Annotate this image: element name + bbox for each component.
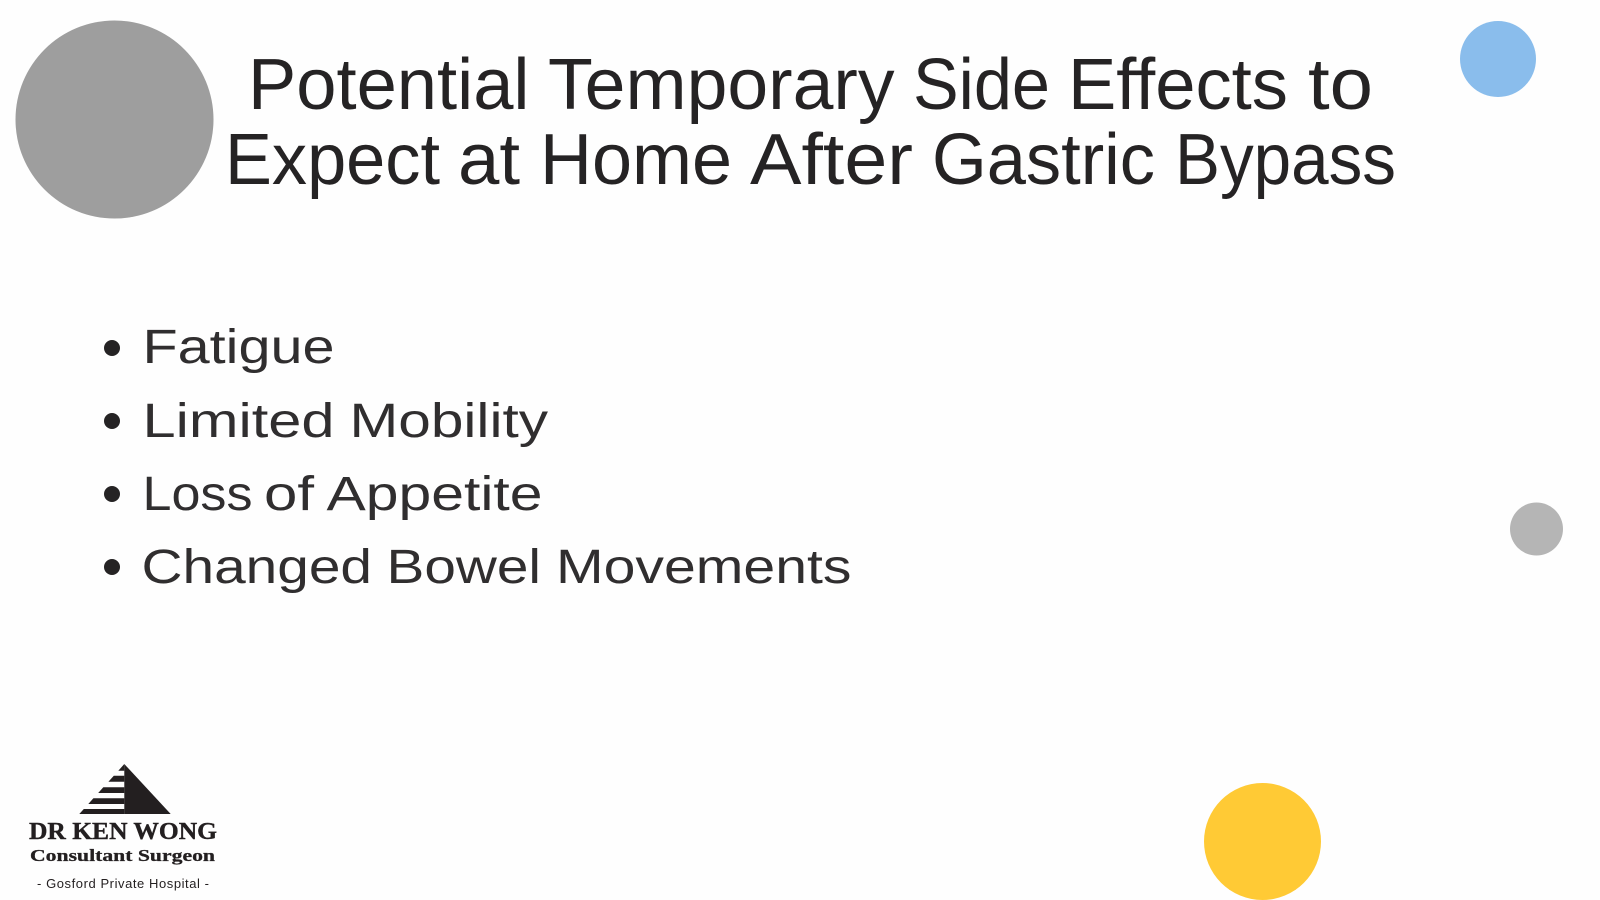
title: at bbox=[458, 120, 520, 200]
decorative circle: blue bbox=[1460, 21, 1536, 97]
list item: Loss of Appetite: Loss bbox=[142, 468, 252, 521]
title: Side bbox=[913, 45, 1050, 125]
list item: Limited Mobility bbox=[104, 395, 548, 448]
list item: Fatigue bbox=[104, 321, 334, 374]
list item: Changed Bowel Movements: Bowel bbox=[386, 541, 541, 594]
icon: striped pyramid bbox=[79, 764, 171, 814]
title bbox=[225, 45, 1396, 200]
bullet list: side effects bbox=[104, 321, 852, 594]
title: Home bbox=[540, 120, 732, 200]
decorative circle: yellow bbox=[1204, 783, 1321, 900]
list item: Changed Bowel Movements: Changed bbox=[142, 541, 372, 594]
title: to bbox=[1308, 45, 1373, 125]
list item: Changed Bowel Movements bbox=[104, 541, 852, 594]
title: After bbox=[750, 120, 913, 200]
title: Bypass bbox=[1175, 120, 1396, 200]
logo name: DR KEN WONG bbox=[29, 819, 217, 845]
list item: Changed Bowel Movements: Movements bbox=[556, 541, 852, 594]
title: Effects bbox=[1068, 45, 1288, 125]
logo hospital line: - Gosford Private Hospital - bbox=[37, 876, 209, 891]
title: Gastric bbox=[932, 120, 1155, 200]
list item: Loss of Appetite: of bbox=[264, 468, 315, 521]
logo subtitle: Consultant Surgeon bbox=[30, 846, 216, 865]
list item: Limited Mobility: Mobility bbox=[350, 395, 548, 448]
list item: Limited Mobility: Limited bbox=[142, 395, 334, 448]
logo: Dr Ken Wong bbox=[29, 764, 217, 891]
list item: Loss of Appetite bbox=[104, 468, 542, 521]
title: Expect bbox=[225, 120, 440, 200]
title: Temporary bbox=[548, 45, 894, 125]
title: Potential bbox=[248, 45, 530, 125]
list item: Fatigue: Fatigue bbox=[142, 321, 334, 374]
list item: Loss of Appetite: Appetite bbox=[326, 468, 542, 521]
decorative circle: small grey bbox=[1510, 502, 1563, 556]
decorative circle: large grey bbox=[16, 20, 214, 218]
